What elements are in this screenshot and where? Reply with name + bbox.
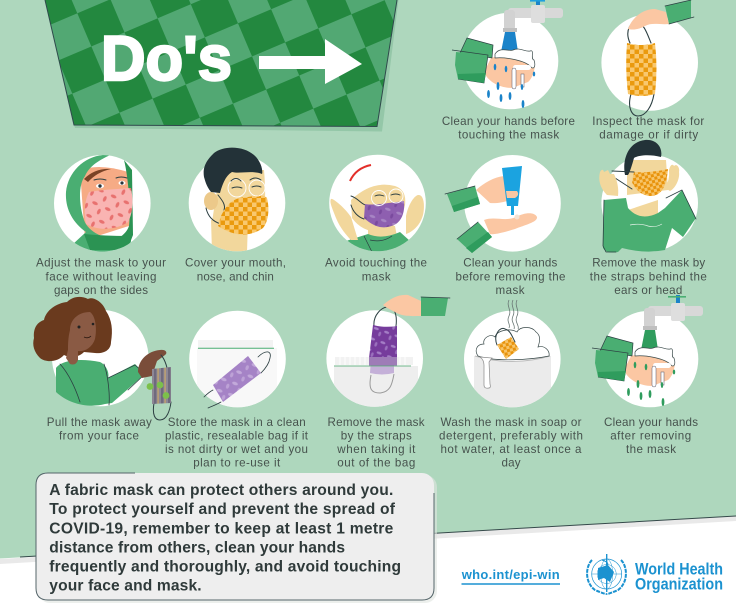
icon: washing hands, green water [592,295,703,406]
caption: before removing the [456,270,566,283]
caption: by the straps [341,429,412,442]
step 3: adjust the mask [36,155,166,297]
callout text: A fabric mask can protect others around you. [49,482,393,499]
step 7: remove by the straps [590,140,707,297]
caption [36,257,166,297]
icon: bag and mask with hand [334,295,450,416]
caption: plan to re-use it [193,457,281,470]
icon: hand holding mask [626,0,694,116]
caption: damage or if dirty [599,128,698,142]
callout text: frequently and thoroughly, and avoid touching [49,558,401,575]
caption: Wash the mask in soap or [440,416,582,429]
caption: Store the mask in a clean [168,416,306,429]
caption: mask [362,270,391,283]
caption: Pull the mask away [47,416,152,429]
icon: resealable bag with mask [197,340,277,414]
caption: mask [496,284,525,297]
callout text: distance from others, clean your hands [49,539,345,556]
caption: the straps behind the [590,270,707,283]
callout text: your face and mask. [49,577,202,594]
callout: key message [36,473,437,603]
heading: Do's [101,24,232,94]
caption [47,416,152,442]
step 6: clean hands before removing [445,155,566,297]
caption: ears or head [614,284,682,297]
caption: Clean your hands [463,257,558,270]
step 9: store the mask in a bag [165,311,309,470]
organization name [635,560,723,594]
callout text: COVID-19, remember to keep at least 1 metre [49,520,394,537]
caption [592,115,704,142]
icon: washing hands [452,0,563,108]
icon: hands with sanitizer [445,166,537,253]
icon: WHO emblem [587,554,626,594]
caption [442,115,575,142]
caption: day [502,457,521,470]
caption: Clean your hands before [442,115,575,128]
logo: World Health Organization [587,554,723,594]
caption [185,257,286,283]
step 10: remove from the bag [326,295,450,470]
caption: Adjust the mask to your [36,257,166,270]
caption: when taking it [336,443,416,456]
caption [165,416,309,470]
icon: man with glasses [204,148,268,252]
caption: plastic, resealable bag if it [165,429,309,442]
caption: out of the bag [337,457,415,470]
caption: the mask [626,443,676,456]
step 5: avoid touching the mask [325,155,427,283]
step 8: pull the mask away [33,297,171,442]
icon: older woman with hands raised [330,165,424,260]
icon: woman in hijab [66,155,133,260]
caption: touching the mask [458,128,559,142]
caption: Remove the mask [328,416,425,429]
caption [590,257,707,297]
arrow [259,39,362,84]
step 2: inspect the mask [592,0,704,142]
caption [604,416,698,456]
organization name: Organization [635,574,723,594]
step 1: clean hands before touching [442,0,575,142]
caption: nose, and chin [197,270,274,283]
caption: is not dirty or wet and you [165,443,308,456]
step 11: wash the mask [439,300,583,470]
step 12: clean hands after removing [592,295,703,456]
caption [456,257,566,297]
caption: gaps on the sides [54,284,148,297]
caption: detergent, preferably with [439,429,583,442]
caption: hot water, at least once a [440,443,582,456]
caption: Clean your hands [604,416,698,429]
caption: from your face [59,429,139,442]
caption: Remove the mask by [592,257,705,270]
step 4: cover mouth, nose and chin [185,148,286,283]
callout text [49,482,401,594]
icon: pot with foam and mask [474,300,551,416]
icon: man removing mask [599,140,696,252]
caption: after removing [610,429,691,442]
icon: woman holding contaminated mask [33,297,171,420]
caption [325,257,427,283]
caption [328,416,425,470]
caption: Cover your mouth, [185,257,286,270]
caption: face without leaving [46,270,156,283]
caption: Avoid touching the [325,257,427,270]
caption [439,416,583,470]
callout text: To protect yourself and prevent the spread of [49,501,396,518]
link: who.int/epi-win: who.int/epi-win [461,567,560,582]
caption: Inspect the mask for [592,115,704,128]
title banner [45,0,398,132]
